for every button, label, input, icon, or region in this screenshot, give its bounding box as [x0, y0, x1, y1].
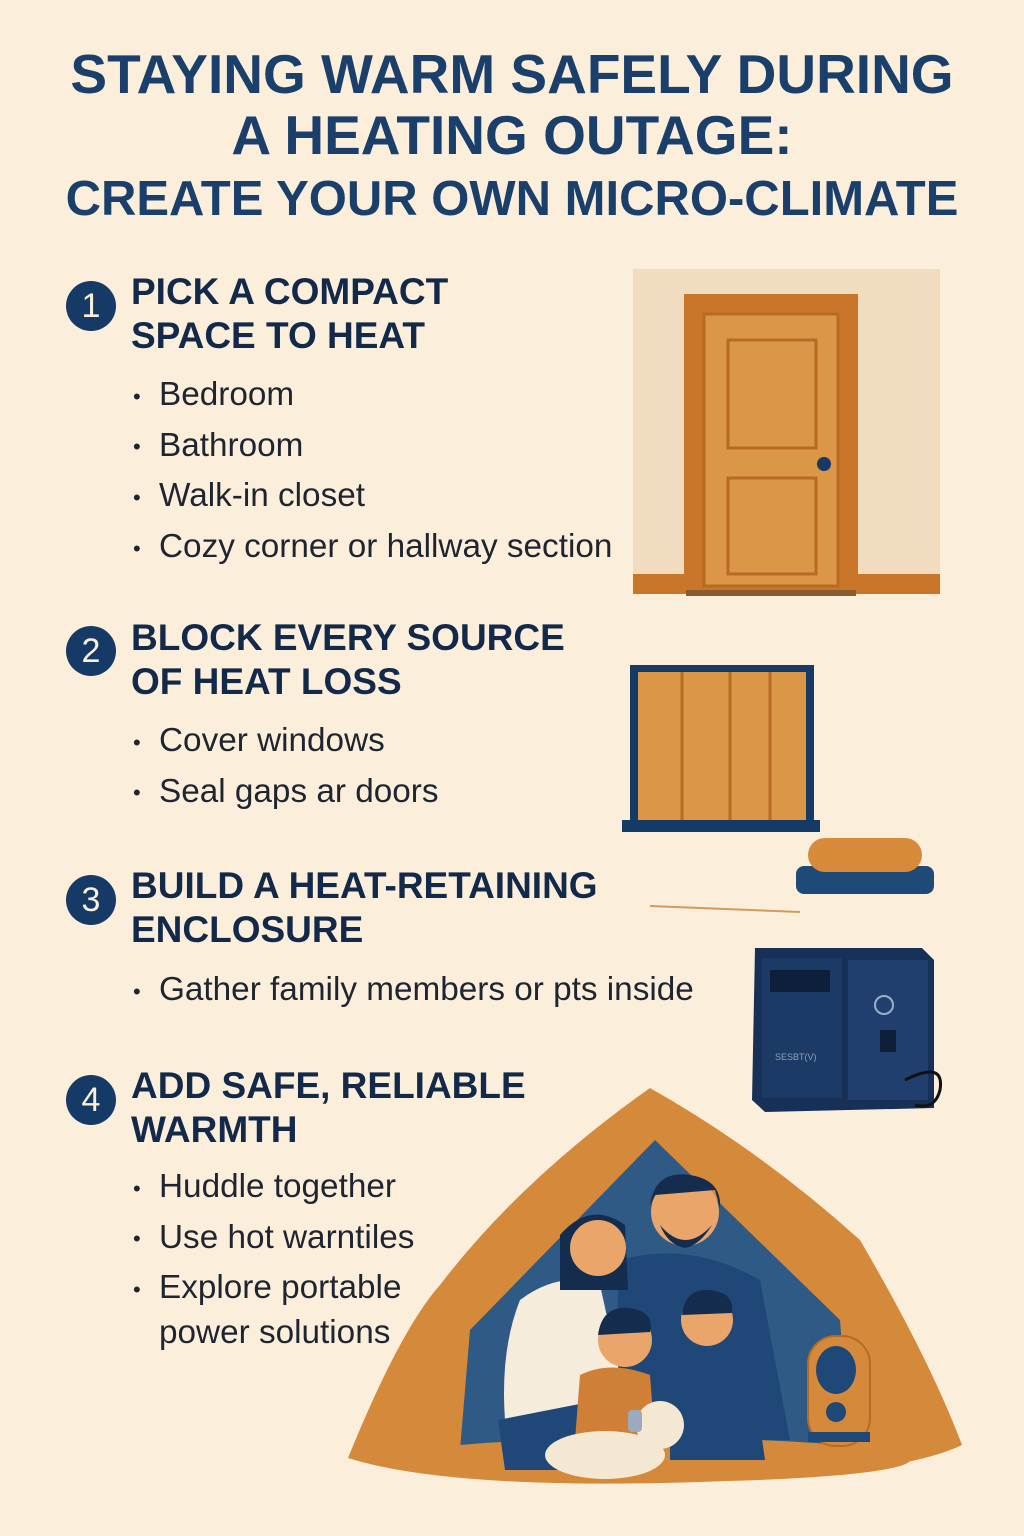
step 1 number — [66, 281, 116, 331]
step 4 bullets — [134, 1168, 414, 1351]
step 1 bullets: Cozy corner or hallway section — [159, 528, 612, 565]
step 4 number: 4 — [82, 1081, 100, 1119]
step 1 heading: SPACE TO HEAT — [131, 315, 425, 356]
step 1 bullets — [134, 376, 612, 565]
step 3 number — [66, 875, 116, 925]
title: A HEATING OUTAGE: — [231, 104, 793, 166]
step 3 heading: BUILD A HEAT-RETAINING — [131, 865, 598, 906]
icon: portable power station — [752, 948, 941, 1112]
step 4 heading: WARMTH — [131, 1109, 297, 1150]
step 4 bullets: power solutions — [159, 1314, 390, 1351]
title: CREATE YOUR OWN MICRO-CLIMATE — [66, 172, 958, 226]
step 1 heading: PICK A COMPACT — [131, 271, 448, 312]
step 2 bullets — [134, 722, 438, 810]
title — [66, 43, 958, 226]
icon: covered window and draft stopper — [622, 665, 934, 912]
step 2 heading: BLOCK EVERY SOURCE — [131, 617, 565, 658]
step 1 bullets: Walk-in closet — [159, 477, 365, 514]
step 3 heading — [131, 865, 598, 950]
step 2 bullets: Seal gaps ar doors — [159, 773, 438, 810]
step 3 bullets: Gather family members or pts inside — [159, 971, 694, 1008]
step 3 number: 3 — [82, 881, 100, 919]
step 2 heading: OF HEAT LOSS — [131, 661, 402, 702]
step 3 heading: ENCLOSURE — [131, 909, 363, 950]
icon: door — [633, 269, 940, 596]
step 1 heading — [131, 271, 448, 356]
step 4 bullets: Use hot warntiles — [159, 1219, 414, 1256]
step 2 heading — [131, 617, 565, 702]
step 1 number: 1 — [82, 287, 100, 325]
step 1 bullets: Bathroom — [159, 427, 303, 464]
step 2 number — [66, 626, 116, 676]
step 4 bullets: Explore portable — [159, 1269, 401, 1306]
step 2 number: 2 — [82, 632, 100, 670]
step 4 number — [66, 1075, 116, 1125]
title: STAYING WARM SAFELY DURING — [70, 43, 954, 105]
illustration: family in tent — [348, 1088, 962, 1484]
icon: portable power station: SESBT(V) — [775, 1052, 817, 1062]
step 2 bullets: Cover windows — [159, 722, 385, 759]
step 4 heading — [131, 1065, 526, 1150]
step 4 heading: ADD SAFE, RELIABLE — [131, 1065, 526, 1106]
step 4 bullets: Huddle together — [159, 1168, 396, 1205]
step 1 bullets: Bedroom — [159, 376, 294, 413]
